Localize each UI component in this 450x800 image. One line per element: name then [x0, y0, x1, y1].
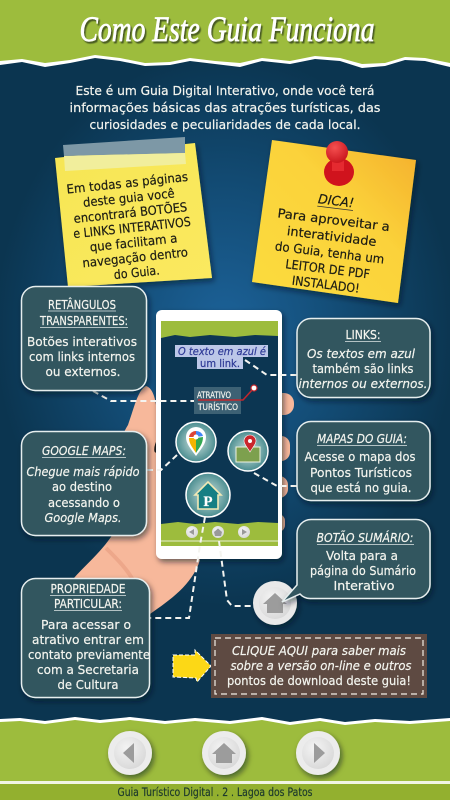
callout: mapas do guia: Acesse o mapa dos: [304, 449, 416, 464]
link sample: O texto em azul é: [178, 346, 266, 358]
call to action box: pontos de download deste guia!: [227, 673, 411, 688]
note text: Em todas as páginas: [66, 169, 189, 197]
callout: links: internos ou externos.: [298, 376, 428, 391]
phone: [156, 310, 282, 559]
connector lines: [93, 360, 297, 618]
callout: mapas do guia: MAPAS DO GUIA:: [317, 431, 407, 446]
note text: e LINKS INTERATIVOS: [72, 214, 191, 241]
tip text: do Guia, tenha um: [274, 238, 385, 267]
button: next: [296, 731, 340, 775]
footer text bar: [0, 781, 450, 800]
arrow: yellow: [173, 650, 211, 682]
button: home: [202, 731, 246, 775]
tape: [63, 137, 186, 171]
callout: botão sumário: Volta para a: [326, 548, 398, 563]
icon: guide map: [228, 431, 268, 471]
tip text: interatividade: [286, 223, 378, 249]
intro text: informações básicas das atrações turísticas, das: [70, 100, 380, 115]
tip text: LEITOR DE PDF: [285, 256, 371, 281]
callout: propriedade particular: PROPRIEDADE: [50, 581, 126, 596]
footer band: [0, 717, 450, 800]
callout: mapas do guia: [297, 422, 430, 500]
callout: propriedade particular: de Cultura: [58, 677, 118, 692]
note text: encontrará BOTÕES: [73, 199, 188, 226]
callout: propriedade particular: contato previamente: [28, 647, 150, 662]
icon: private property: [186, 473, 230, 517]
callout: retângulos transparentes: RETÂNGULOS: [48, 297, 116, 312]
tip text: INSTALADO!: [291, 273, 360, 296]
callout: mapas do guia: que está no guia.: [310, 480, 412, 495]
intro text: Este é um Guia Digital Interativo, onde você terá: [76, 83, 374, 98]
callout: retângulos transparentes: com links internos: [29, 349, 135, 364]
button: previous: [108, 731, 152, 775]
callout: propriedade particular: PARTICULAR:: [54, 596, 122, 611]
icon: red push pin: [324, 141, 354, 186]
sticky note: navigation: [55, 137, 212, 287]
tip text: DICA!: [317, 192, 355, 211]
callout: google maps: Chegue mais rápido: [26, 464, 140, 479]
icon: private property: P: [203, 494, 213, 510]
callout: botão sumário: Interativo: [334, 578, 394, 593]
intro text: curiosidades e peculiaridades de cada local.: [90, 117, 360, 132]
callout: links: LINKS:: [346, 327, 380, 342]
tip text: Para aproveitar a: [277, 205, 391, 234]
callout: propriedade particular: [22, 578, 150, 698]
callout: propriedade particular: Para acessar o: [41, 617, 131, 632]
note text: navegação dentro: [82, 244, 189, 270]
callout: retângulos transparentes: TRANSPARENTES:: [39, 313, 128, 328]
callout: retângulos transparentes: ou externos.: [46, 364, 120, 379]
callout: propriedade particular: atrativo entrar em: [32, 632, 144, 647]
callout: google maps: acessando o: [48, 495, 120, 510]
callout: links: Os textos em azul: [307, 346, 415, 361]
callout: google maps: ao destino: [52, 479, 112, 494]
button: home highlight: [253, 581, 297, 625]
callout: google maps: [22, 432, 146, 536]
phone screen: [161, 321, 278, 546]
transparent rectangle sample: TURÍSTICO: [197, 401, 238, 413]
call to action box: CLIQUE AQUI para saber mais: [232, 643, 406, 658]
callout: botão sumário: BOTÃO SUMÁRIO:: [316, 530, 414, 545]
callout: retângulos transparentes: Botões interativos: [27, 334, 137, 349]
transparent rectangle sample: ATRATIVO: [197, 391, 231, 401]
callout: botão sumário: [282, 520, 430, 602]
tip text: [269, 188, 393, 299]
illustration: hand: [74, 386, 294, 614]
callout: mapas do guia: Pontos Turísticos: [310, 465, 412, 480]
call to action box: sobre a versão on-line e outros: [230, 658, 412, 673]
note text: que facilitam a: [89, 230, 178, 254]
note text: do Guia.: [113, 262, 160, 282]
call to action box: [211, 634, 427, 698]
callout: google maps: GOOGLE MAPS:: [42, 443, 126, 458]
callout: retângulos transparentes: [22, 286, 146, 390]
phone nav buttons: [186, 526, 250, 538]
icon: google maps: [176, 422, 216, 462]
callout: links: também são links: [312, 361, 414, 376]
sticky note: tip: [252, 140, 416, 303]
callout: propriedade particular: com a Secretaria: [37, 662, 139, 677]
callout: links: [297, 318, 430, 398]
note text: [66, 169, 198, 286]
header band: [0, 0, 450, 68]
intro text: [70, 83, 380, 132]
link sample: um link.: [200, 358, 240, 370]
link sample: [175, 345, 268, 370]
callout: botão sumário: página do Sumário: [310, 563, 416, 578]
note text: deste guia você: [82, 185, 176, 210]
transparent rectangle sample: [194, 385, 257, 414]
callout: google maps: Google Maps.: [44, 510, 122, 525]
footer text bar: Guia Turístico Digital . 2 . Lagoa dos Patos: [118, 785, 313, 799]
